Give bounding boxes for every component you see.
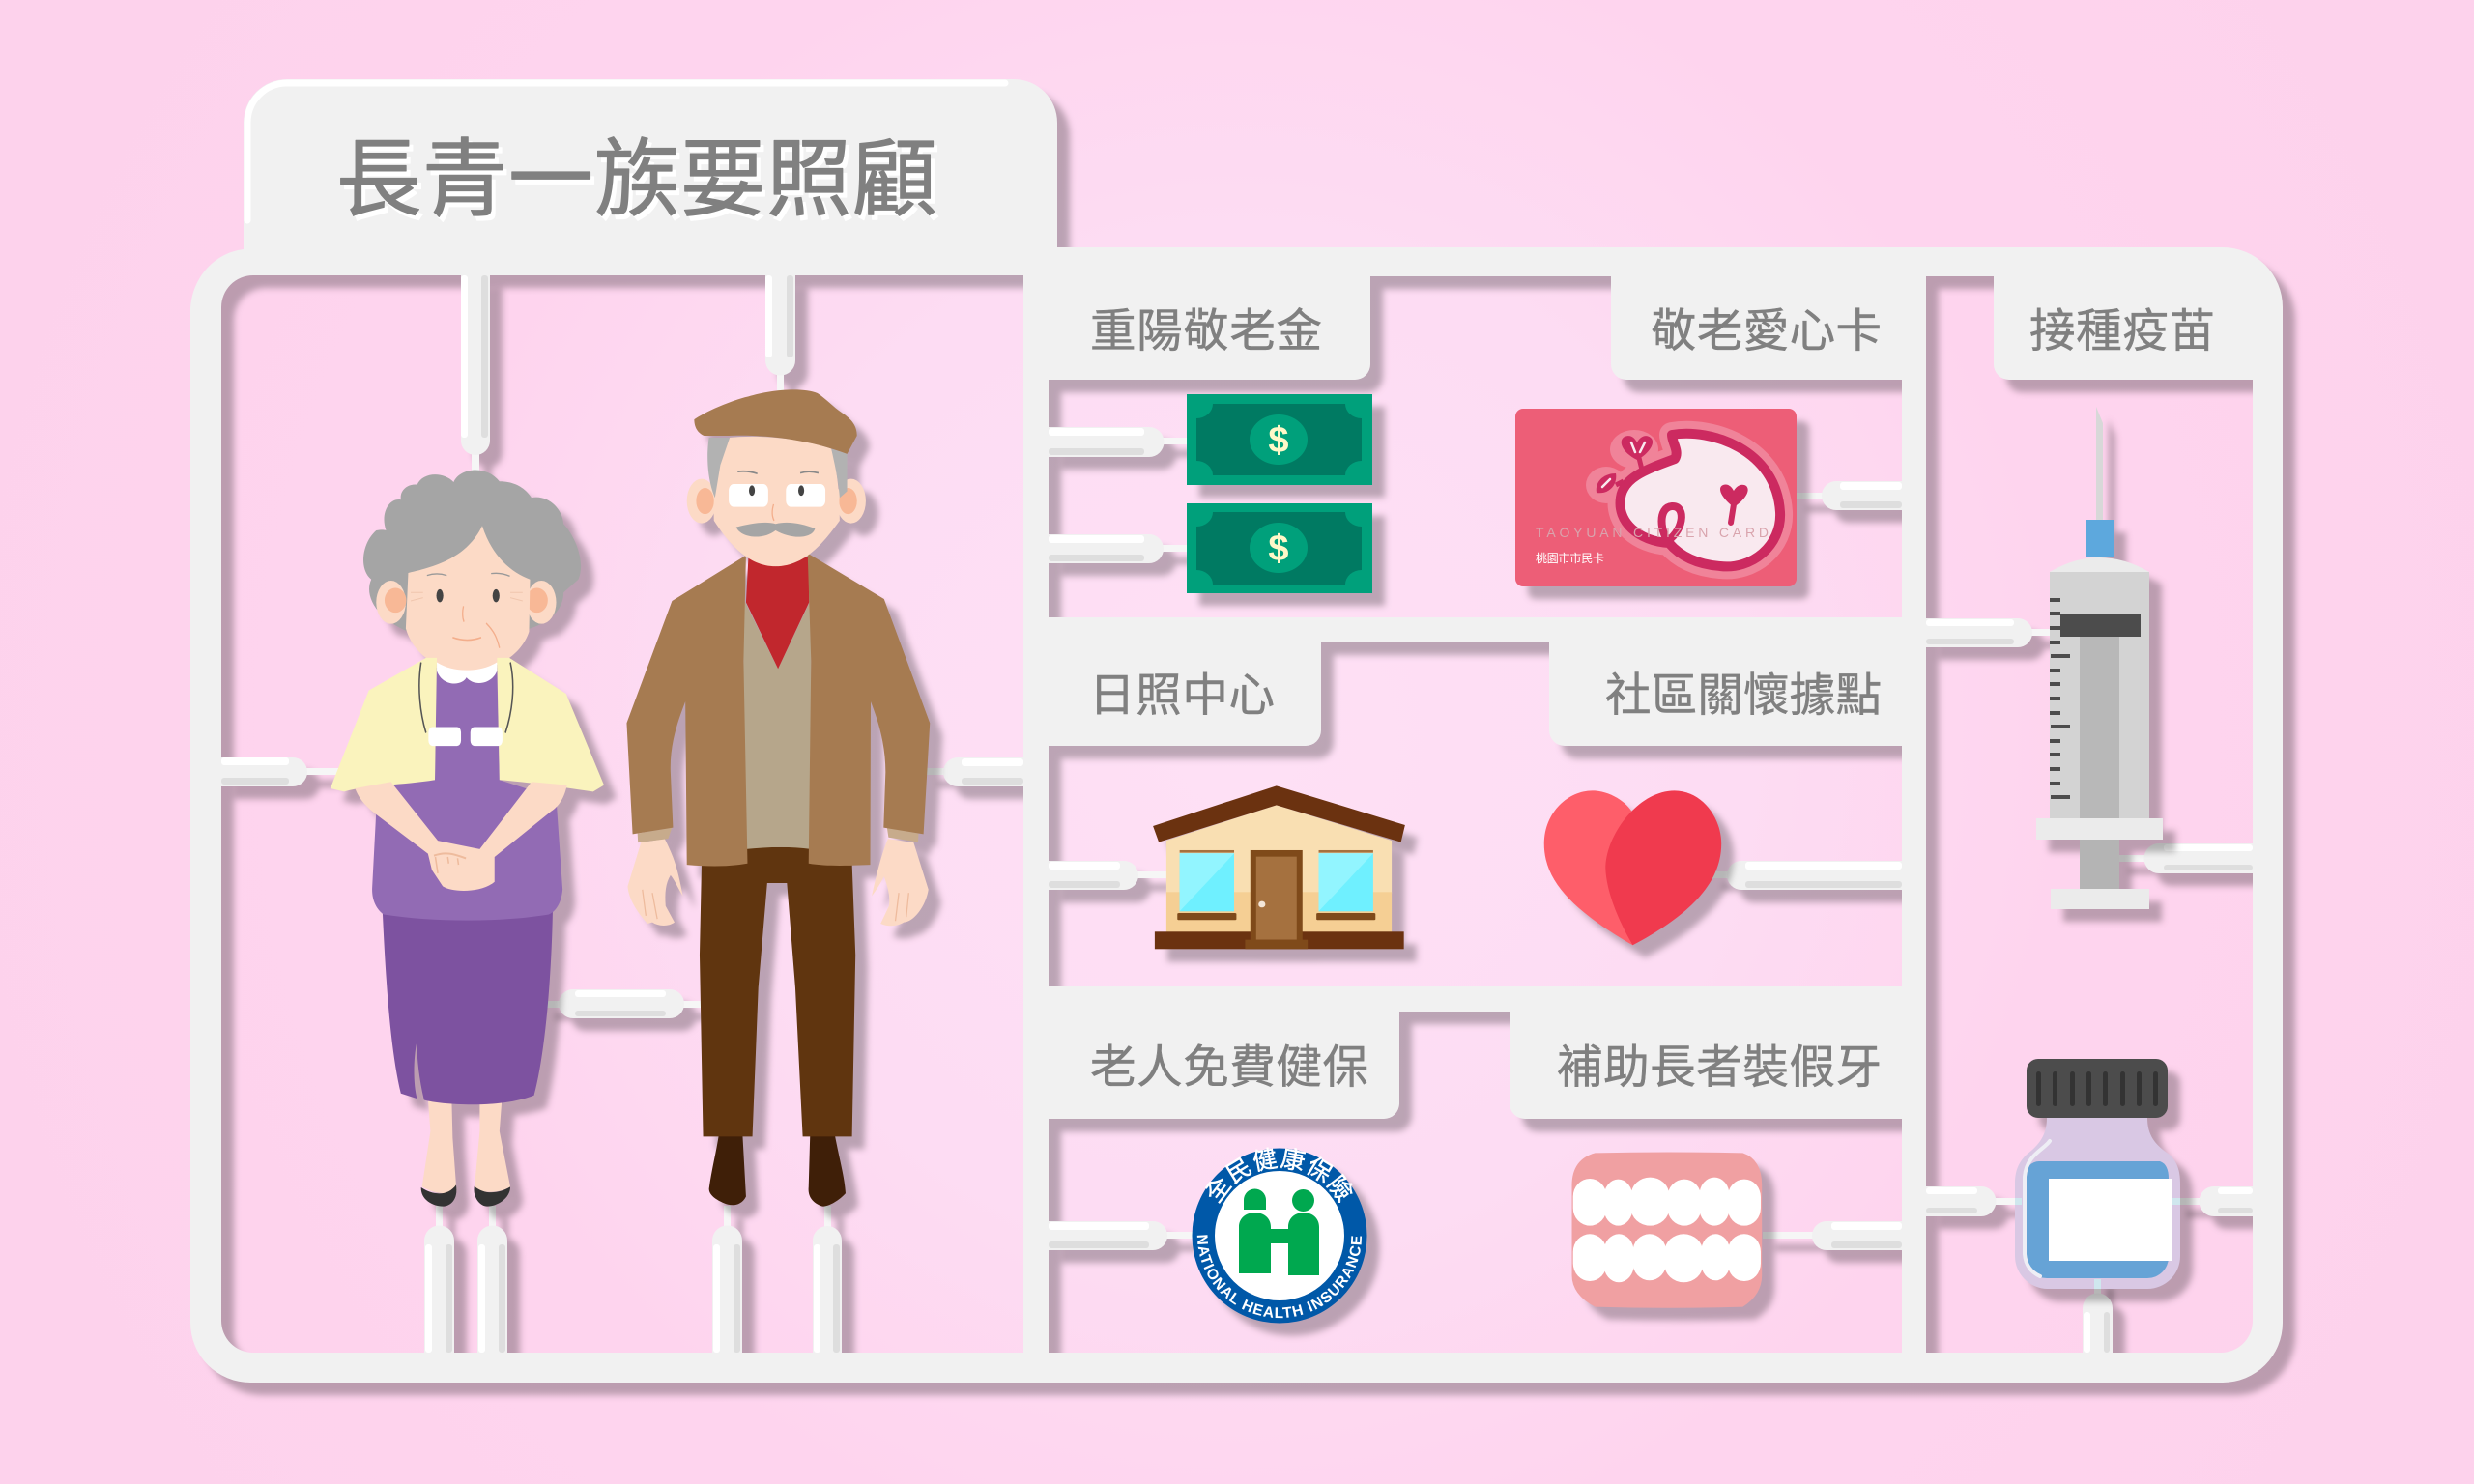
sprue: vial left — [1926, 1186, 2018, 1216]
gums — [1572, 1152, 1762, 1308]
label — [2049, 1179, 2172, 1261]
right window — [1316, 850, 1375, 920]
icon: National Health Insurance badge — [1193, 1148, 1383, 1339]
figure: grandfather — [626, 389, 930, 1207]
sprue: house — [1049, 861, 1169, 890]
label: 社區關懷據點: 社區關懷據點 — [1605, 671, 1882, 722]
label: 敬老愛心卡: 敬老愛心卡 — [1651, 306, 1882, 357]
banknote 2: $ — [1268, 528, 1289, 569]
cape — [331, 658, 604, 791]
sprue: vial right — [2174, 1186, 2253, 1216]
sprue: grandpa right — [926, 757, 1023, 786]
shoes — [709, 1134, 846, 1207]
icon: National Health Insurance badge: NATIONAL HEALTH INSURANCE — [1196, 1235, 1363, 1318]
glass body — [2015, 1118, 2180, 1289]
sprue: grandpa left foot — [712, 1206, 742, 1353]
title tab highlight — [247, 83, 1005, 220]
skirt — [383, 911, 553, 1104]
connector stubs — [2015, 1198, 2180, 1289]
sprue: grandma right foot — [477, 1206, 507, 1353]
icon: Taoyuan citizen card: TAOYUAN CITIZEN CARD — [1536, 525, 1769, 540]
hands — [627, 839, 929, 926]
side hair — [707, 438, 848, 498]
upper teeth — [1573, 1178, 1761, 1226]
banknote 1: $ — [1268, 420, 1289, 461]
shoes — [421, 1184, 510, 1207]
door — [1245, 850, 1308, 949]
plunger stem — [2080, 840, 2119, 889]
flange — [2036, 818, 2163, 840]
label: 接種疫苗: 接種疫苗 — [2029, 306, 2215, 357]
sprue: grandpa right foot — [813, 1206, 842, 1353]
face — [406, 526, 530, 671]
icon: banknotes — [1187, 394, 1372, 593]
finger lines — [434, 853, 466, 873]
scarf — [746, 556, 809, 669]
plastic model frame with title tab and label tabs — [190, 79, 2283, 1383]
thumb rest — [2051, 889, 2149, 909]
lower teeth — [1573, 1234, 1761, 1282]
sprue: heart — [1711, 861, 1902, 890]
needle — [2096, 407, 2103, 520]
icon: Taoyuan citizen card — [1515, 409, 1797, 586]
sprue: grandma left — [221, 757, 338, 786]
eyes and brows — [737, 471, 819, 521]
flat cap — [694, 389, 857, 454]
jacket — [626, 554, 930, 866]
icon: National Health Insurance badge: 全民健康保險 — [1205, 1148, 1353, 1204]
title: 長青一族要照顧 — [336, 131, 937, 227]
sprue: grandpa head — [765, 275, 795, 390]
banknote 2 — [1187, 503, 1372, 593]
title: 長青一族要照顧 — [340, 136, 941, 232]
label: 日照中心: 日照中心 — [1089, 671, 1275, 722]
vest — [743, 599, 811, 849]
green H figures — [1239, 1188, 1319, 1275]
needle hub — [2086, 520, 2114, 556]
sprue: health insurance badge — [1049, 1221, 1196, 1250]
label: 重陽敬老金: 重陽敬老金 — [1090, 306, 1322, 357]
ears — [376, 581, 557, 624]
base — [1155, 931, 1404, 949]
cap — [2027, 1059, 2168, 1118]
glass highlight — [2025, 1141, 2050, 1276]
peach logo — [1586, 430, 1780, 566]
barrel — [2050, 572, 2149, 818]
figure: grandmother — [331, 470, 604, 1207]
liquid — [2026, 1161, 2169, 1278]
roof — [1153, 785, 1405, 842]
cap ribs — [2036, 1071, 2158, 1106]
sprue: grandma head — [461, 275, 490, 471]
cape lines — [419, 663, 513, 733]
legs — [422, 1099, 510, 1193]
sprue: syringe barrel — [1926, 618, 2054, 647]
cuffs — [638, 828, 919, 842]
icon: syringe — [2036, 407, 2163, 909]
sprue: vial bottom — [2083, 1275, 2113, 1353]
dress — [372, 668, 562, 921]
moustache — [736, 523, 815, 537]
facial features — [411, 573, 523, 648]
clasps — [428, 727, 503, 746]
sprue: dentures — [1763, 1221, 1902, 1250]
face — [714, 437, 840, 566]
icon: Taoyuan citizen card: 桃園市市民卡 — [1536, 551, 1604, 565]
icon: house — [1153, 785, 1405, 949]
ears — [687, 479, 866, 524]
icon: vaccine vial — [2015, 1059, 2180, 1289]
left window — [1177, 850, 1236, 920]
sprue: between figures — [543, 989, 703, 1018]
section labels — [1089, 306, 2215, 1094]
sprue: bill 1 — [1049, 427, 1189, 457]
sprue: citizen card — [1795, 481, 1902, 510]
plunger — [2080, 637, 2119, 818]
label: 老人免費健保: 老人免費健保 — [1090, 1042, 1368, 1094]
trousers — [700, 847, 855, 1136]
barrel shoulder — [2050, 557, 2149, 572]
sprue: syringe plunger — [2116, 843, 2253, 873]
label: 補助長者裝假牙: 補助長者裝假牙 — [1557, 1042, 1882, 1094]
collar — [437, 663, 497, 683]
sprue: grandma left foot — [424, 1206, 454, 1353]
scale ticks — [2050, 598, 2070, 799]
arms and hands — [355, 782, 567, 891]
walls — [1166, 805, 1392, 894]
glasses — [729, 484, 825, 507]
sprue: bill 2 — [1049, 534, 1189, 563]
hair — [363, 470, 581, 632]
sprue runners attaching the parts to the frame — [221, 275, 2253, 1353]
banknote 1 — [1187, 394, 1372, 485]
icon: heart — [1544, 790, 1721, 945]
icon: dentures — [1572, 1152, 1762, 1308]
